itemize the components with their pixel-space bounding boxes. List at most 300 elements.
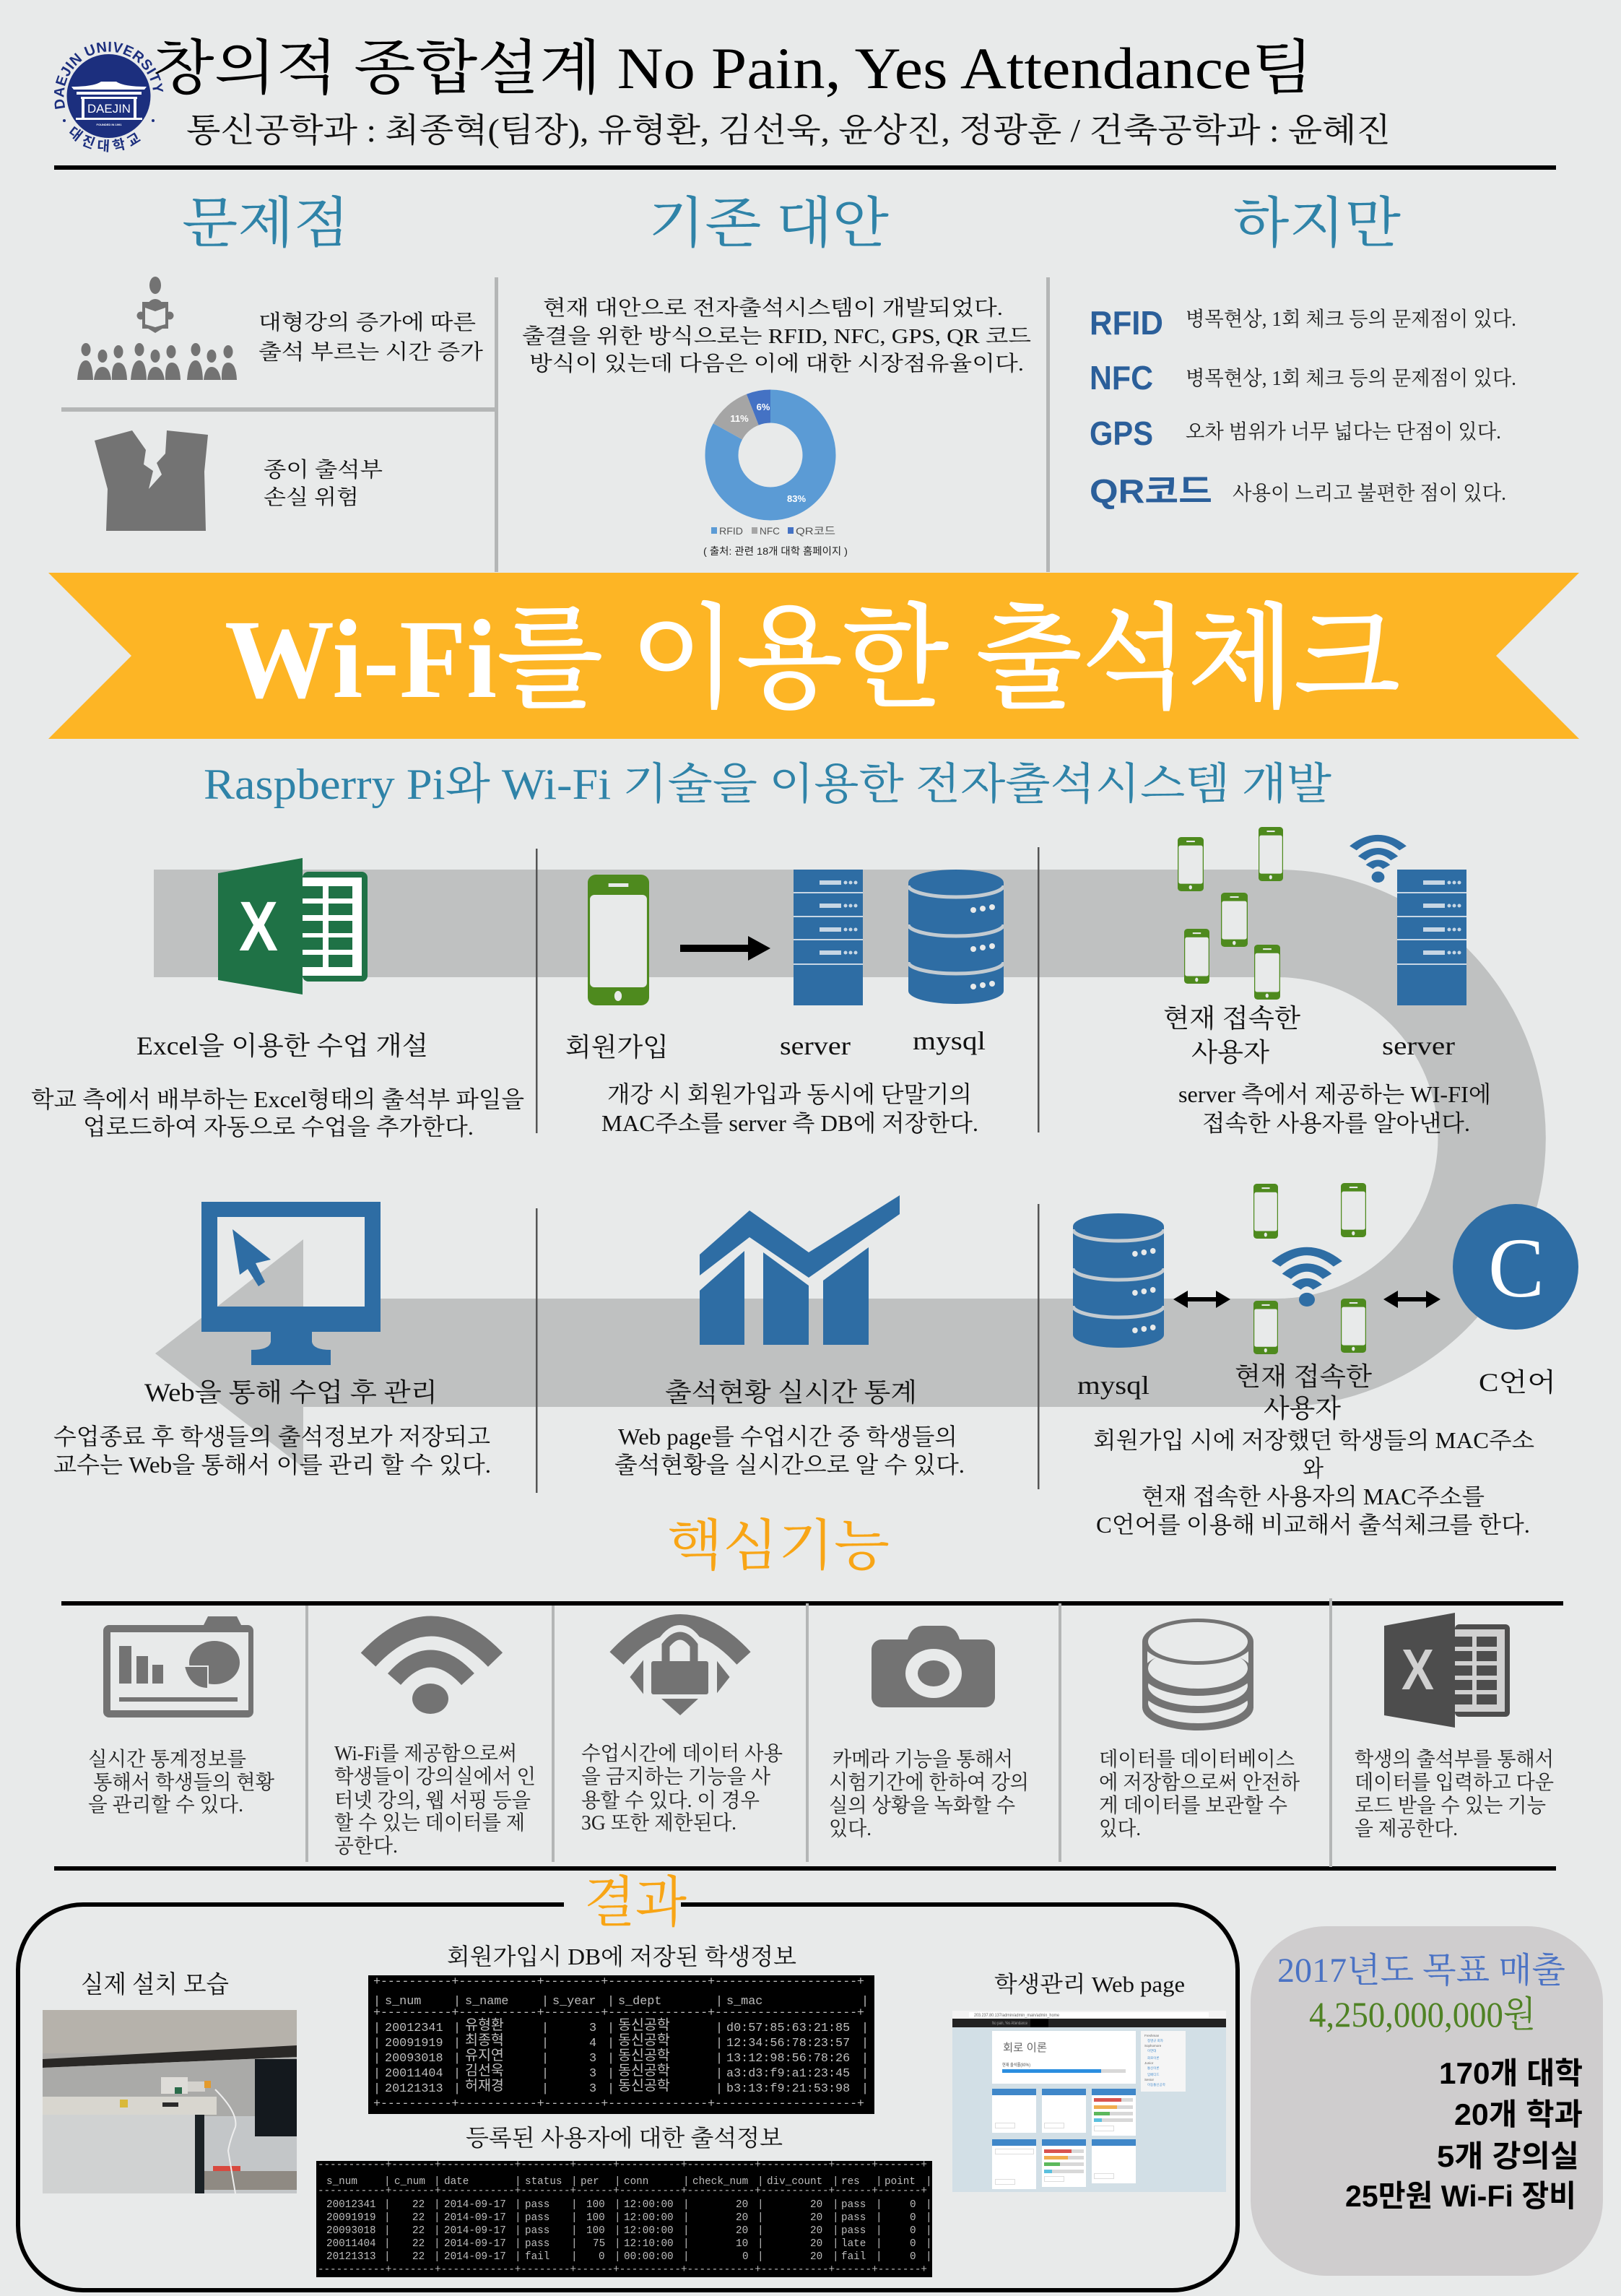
table: attendance: |	[833, 2238, 839, 2250]
table: student info: d0:57:85:63:21:85	[726, 2022, 850, 2035]
table: attendance: |	[683, 2199, 690, 2211]
table: attendance: 20011404	[326, 2238, 376, 2250]
label: connected users: 현재 접속한	[1235, 1362, 1372, 1391]
text: 있다.	[1099, 1817, 1141, 1840]
logo: Daejin University: DAEJIN	[87, 102, 131, 116]
table: attendance: |	[515, 2251, 521, 2263]
table: student info: 20121313	[385, 2082, 443, 2096]
table: attendance: |	[384, 2251, 391, 2263]
table: attendance: div_count	[767, 2176, 822, 2188]
QR code: QR코드	[1090, 472, 1212, 510]
table: student info: 20093018	[385, 2052, 443, 2066]
table: student info: 3	[589, 2052, 596, 2066]
description: 개강 시 회원가입과 동시에 단말기의	[607, 1081, 972, 1107]
text: 수업시간에 데이터 사용	[581, 1742, 783, 1765]
description: 학교 측에서 배부하는 Excel형태의 출석부 파일을	[31, 1086, 524, 1112]
table: attendance: 20	[736, 2212, 748, 2224]
description: 출석현황을 실시간으로 알 수 있다.	[614, 1452, 965, 1478]
table: student info: s_num	[385, 1995, 421, 2009]
table: attendance: pass	[525, 2212, 549, 2224]
table: attendance: late	[841, 2238, 866, 2250]
table: attendance: |	[683, 2238, 690, 2250]
table: attendance: 2014-09-17	[444, 2225, 506, 2237]
table: attendance: 0	[742, 2251, 749, 2263]
results frame	[18, 1905, 1238, 2290]
sales target heading: 2017년도 목표 매출	[1277, 1951, 1565, 1990]
table: attendance: 10	[736, 2238, 748, 2250]
table: attendance: 2014-09-17	[444, 2238, 506, 2250]
heading: problems: 문제점	[182, 194, 349, 254]
label: web page: 학생관리 Web page	[994, 1972, 1185, 1997]
table: student info: 최종혁	[465, 2028, 504, 2049]
table: attendance: |	[757, 2225, 764, 2237]
table: attendance: |	[384, 2176, 391, 2188]
text: 을 관리할 수 있다.	[88, 1793, 243, 1816]
table: attendance: |	[515, 2176, 521, 2188]
table: student info: b3:13:f9:21:53:98	[726, 2082, 850, 2096]
target list: 170개 대학	[1439, 2056, 1583, 2090]
table: attendance: check_num	[692, 2176, 748, 2188]
text: 카메라 기능을 통해서	[833, 1748, 1013, 1771]
table: attendance: |	[614, 2176, 621, 2188]
text	[1099, 1748, 1300, 1840]
label: installation: 실제 설치 모습	[81, 1971, 229, 1998]
GPS: 오차 범위가 너무 넓다는 단점이 있다.	[1186, 420, 1501, 443]
table: attendance: |	[876, 2251, 882, 2263]
label: connected users: 사용자	[1191, 1038, 1269, 1067]
table: student info: |	[453, 2067, 461, 2081]
table: student info: +----------+-----------+--------+--------------+--------------------+	[373, 1975, 864, 1989]
table: attendance: 2014-09-17	[444, 2212, 506, 2224]
team members: 통신공학과 : 최종혁(팀장), 유형환, 김선욱, 윤상진, 정광훈 / 건축공학과 : 윤혜진	[186, 112, 1391, 149]
table: student info: |	[542, 2082, 549, 2096]
table: student info: |	[453, 2037, 461, 2050]
table: attendance: 20	[736, 2225, 748, 2237]
chart legend	[711, 525, 835, 537]
table: student info: a3:d3:f9:a1:23:45	[726, 2067, 850, 2081]
table: student info: 3	[589, 2067, 596, 2081]
table: attendance: s_num	[326, 2176, 357, 2188]
table: attendance: |	[515, 2238, 521, 2250]
table: student info: |	[542, 1995, 549, 2009]
sales amount: 4,250,000,000원	[1309, 1994, 1536, 2035]
table: attendance: res	[841, 2176, 860, 2188]
table: student info: s_name	[465, 1995, 508, 2009]
text: 할 수 있는 데이터를 제	[334, 1811, 525, 1834]
NFC: NFC	[1090, 359, 1153, 397]
table: student info: |	[716, 1995, 723, 2009]
target list: 20개 학과	[1454, 2097, 1583, 2131]
title: 창의적 종합설계 No Pain, Yes Attendance팀	[152, 35, 1313, 101]
table: attendance: |	[434, 2212, 440, 2224]
table: attendance: |	[683, 2251, 690, 2263]
table: student info: |	[373, 2022, 381, 2035]
table: attendance: |	[571, 2238, 578, 2250]
table: attendance: |	[614, 2225, 621, 2237]
table: attendance: |	[434, 2251, 440, 2263]
table: attendance: |	[515, 2225, 521, 2237]
icon: Excel grey: X	[1401, 1637, 1434, 1702]
table: attendance: 100	[586, 2199, 605, 2211]
table: student info: |	[716, 2052, 723, 2066]
table: attendance: status	[525, 2176, 562, 2188]
table: attendance: |	[876, 2176, 882, 2188]
target list: 25만원 Wi-Fi 장비	[1345, 2179, 1576, 2213]
text: 데이터를 입력하고 다운	[1355, 1771, 1554, 1794]
chart: market share donut	[722, 402, 819, 504]
table: attendance: |	[434, 2176, 440, 2188]
table: attendance: |	[926, 2176, 932, 2188]
table: attendance: pass	[841, 2212, 866, 2224]
table: attendance: 0	[910, 2225, 916, 2237]
icon: Excel: X	[239, 887, 278, 966]
table: attendance: |	[571, 2212, 578, 2224]
screenshot: web page: 현재 출석률(80%)	[1002, 2062, 1030, 2068]
table: attendance: point	[885, 2176, 916, 2188]
screenshot: web page: 이연대	[1147, 2048, 1156, 2053]
chart: market share donut: 11%	[730, 413, 749, 424]
table: attendance: c_num	[394, 2176, 425, 2188]
text	[581, 1742, 783, 1834]
panel: problems	[77, 277, 483, 531]
feature: data lock	[581, 1624, 783, 1834]
label: server: server	[1382, 1031, 1455, 1060]
table: attendance: 20	[810, 2199, 822, 2211]
RFID	[1090, 304, 1516, 342]
description: 회원가입 시에 저장했던 학생들의 MAC주소	[1093, 1427, 1534, 1453]
table: student info: |	[861, 2037, 869, 2050]
label: Web을 통해 수업 후 관리	[144, 1378, 438, 1407]
text: lecture growth: 대형강의 증가에 따른	[258, 311, 476, 334]
icon: server	[1397, 870, 1466, 1005]
label: attendance data: 등록된 사용자에 대한 출석정보	[466, 2125, 783, 2151]
table: attendance: 12:00:00	[624, 2212, 674, 2224]
table: attendance: |	[757, 2251, 764, 2263]
table: student info: 3	[589, 2082, 596, 2096]
heading: results: 결과	[584, 1873, 687, 1933]
feature: camera	[829, 1626, 1029, 1840]
table: student info: |	[861, 2052, 869, 2066]
screenshot: web page: 통신이론	[1147, 2066, 1160, 2071]
table: student info: +----------+-----------+--------+--------------+--------------------+	[373, 2006, 864, 2020]
table: student info: 20012341	[385, 2022, 443, 2035]
table: student info: |	[716, 2082, 723, 2096]
table: attendance	[316, 2159, 932, 2277]
table: attendance: |	[876, 2212, 882, 2224]
table: attendance: |	[614, 2238, 621, 2250]
table: attendance: fail	[525, 2251, 549, 2263]
table: student info: s_dept	[618, 1995, 661, 2009]
text: Wi-Fi를 제공함으로써	[334, 1742, 517, 1765]
table: attendance: conn	[624, 2176, 648, 2188]
panel: however	[1090, 304, 1516, 510]
table: student info: s_mac	[726, 1995, 762, 2009]
screenshot: web page: Sophomore	[1144, 2044, 1162, 2048]
step: member registration	[565, 870, 1004, 1136]
table: attendance: 75	[593, 2238, 605, 2250]
table: attendance: |	[757, 2176, 764, 2188]
table: attendance: 12:00:00	[624, 2225, 674, 2237]
table: student info: 허재경	[465, 2074, 504, 2094]
arrow	[680, 936, 770, 961]
table: attendance: date	[444, 2176, 469, 2188]
description: server 측에서 제공하는 WI-FI에	[1178, 1081, 1491, 1107]
table: student info: |	[607, 1995, 614, 2009]
label: connected users: 현재 접속한	[1163, 1004, 1300, 1033]
icon: mysql database	[908, 870, 1004, 1004]
table: student info: 김선욱	[465, 2058, 504, 2079]
table: attendance: |	[683, 2212, 690, 2224]
table: attendance: |	[833, 2225, 839, 2237]
table: attendance: |	[926, 2225, 932, 2237]
table: attendance: pass	[841, 2199, 866, 2211]
table: student info: |	[453, 2052, 461, 2066]
table: attendance: |	[384, 2212, 391, 2224]
table: student info: |	[716, 2067, 723, 2081]
table: attendance: 22	[412, 2225, 425, 2237]
chart legend: RFID	[719, 525, 743, 537]
chart legend: QR코드	[796, 525, 835, 537]
description: 접속한 사용자를 알아낸다.	[1202, 1110, 1470, 1136]
label: mysql: mysql	[913, 1026, 986, 1055]
icon: phone	[588, 875, 649, 1005]
description	[601, 1081, 978, 1136]
table: attendance: -----------+-------+------------+--------+------+----------+-----------+-----------+------+-------+	[318, 2159, 927, 2171]
table: student info: 3	[589, 2022, 596, 2035]
icon: mysql database	[1073, 1213, 1164, 1348]
banner: Wi-Fi를 이용한 출석체크	[225, 597, 1400, 722]
table: attendance: per	[581, 2176, 599, 2188]
table: attendance: 22	[412, 2212, 425, 2224]
table: attendance: 20	[810, 2251, 822, 2263]
table: student info: |	[453, 2082, 461, 2096]
table: attendance: |	[515, 2199, 521, 2211]
step: Excel course creation	[31, 858, 524, 1140]
table: student info: |	[542, 2052, 549, 2066]
text: lecture growth	[258, 311, 483, 364]
feature: Excel	[1355, 1613, 1554, 1840]
table: student info: |	[716, 2037, 723, 2050]
screenshot: web page: 이동통신공학	[1147, 2082, 1165, 2087]
screenshot: web page	[952, 2011, 1226, 2192]
table: attendance: |	[876, 2225, 882, 2237]
icons: connected phones	[1253, 1183, 1366, 1354]
logo: Daejin University: FOUNDED IN 1991	[97, 123, 122, 126]
screenshot: web page: Senior	[1144, 2078, 1155, 2081]
text: 데이터를 데이터베이스	[1099, 1748, 1295, 1771]
icon: wifi lock	[617, 1624, 744, 1715]
table: attendance: |	[833, 2251, 839, 2263]
text: 에 저장함으로써 안전하	[1099, 1771, 1300, 1794]
table: student info: s_year	[552, 1995, 596, 2009]
table: attendance: 20	[810, 2225, 822, 2237]
label: connected users	[1235, 1362, 1372, 1423]
NFC	[1090, 359, 1516, 397]
table: attendance: 20	[810, 2238, 822, 2250]
table: student info: 동신공학	[618, 2013, 670, 2034]
table: attendance: |	[614, 2251, 621, 2263]
table: attendance: |	[757, 2199, 764, 2211]
table: attendance: |	[926, 2251, 932, 2263]
flow arrow band	[154, 870, 1546, 1468]
description	[614, 1424, 965, 1478]
panel: sales target	[1251, 1926, 1603, 2276]
GPS	[1090, 415, 1501, 452]
description: 현재 접속한 사용자의 MAC주소를	[1142, 1483, 1485, 1509]
table: attendance: |	[384, 2225, 391, 2237]
text: 통해서 학생들의 현황	[93, 1771, 274, 1794]
table: attendance: |	[833, 2199, 839, 2211]
table: attendance: |	[434, 2199, 440, 2211]
table: student info: 20011404	[385, 2067, 443, 2081]
double arrow left	[1173, 1291, 1230, 1308]
table: student info: |	[373, 2052, 381, 2066]
panel: existing alternatives	[522, 296, 1031, 557]
table: attendance: |	[571, 2176, 578, 2188]
step: detect connected users	[1163, 827, 1491, 1136]
icon: monitor	[201, 1202, 381, 1365]
description: 와	[1303, 1455, 1324, 1481]
table: student info: |	[716, 2022, 723, 2035]
text: 학생의 출석부를 통해서	[1355, 1748, 1554, 1771]
screenshot: web page: 회로 이론	[1003, 2042, 1047, 2054]
description: MAC주소를 server 측 DB에 저장한다.	[601, 1110, 978, 1136]
table: attendance: 22	[412, 2251, 425, 2263]
table: attendance: |	[833, 2212, 839, 2224]
description	[1178, 1081, 1491, 1136]
icon: wifi	[368, 1626, 495, 1714]
table: attendance: 0	[910, 2212, 916, 2224]
icon: torn paper	[95, 430, 208, 531]
table: attendance: |	[876, 2199, 882, 2211]
label: Excel을 이용한 수업 개설	[136, 1031, 428, 1060]
icon: C language: C	[1488, 1221, 1544, 1315]
photo: installation	[43, 2010, 297, 2193]
table: student info: |	[373, 2067, 381, 2081]
description: 수업종료 후 학생들의 출석정보가 저장되고	[53, 1424, 490, 1450]
screenshot: web page: Junior	[1144, 2061, 1154, 2065]
text: paper risk: 종이 출석부	[264, 458, 383, 482]
double arrow right	[1383, 1291, 1440, 1308]
table: attendance: 2014-09-17	[444, 2251, 506, 2263]
logo: Daejin University	[53, 42, 163, 152]
table: attendance: fail	[841, 2251, 866, 2263]
text	[88, 1748, 274, 1816]
table: attendance: 2014-09-17	[444, 2199, 506, 2211]
table: attendance: |	[571, 2251, 578, 2263]
text	[829, 1748, 1029, 1840]
NFC: 병목현상, 1회 체크 등의 문제점이 있다.	[1186, 367, 1516, 390]
text: paper risk	[264, 458, 383, 509]
table: attendance: pass	[525, 2225, 549, 2237]
text	[1355, 1748, 1554, 1840]
table: attendance: 20012341	[326, 2199, 376, 2211]
table: student info: |	[542, 2067, 549, 2081]
table: attendance: |	[833, 2176, 839, 2188]
icon: wifi	[1353, 838, 1403, 883]
table: student info: |	[861, 2067, 869, 2081]
icon: server	[794, 870, 863, 1005]
table: attendance: |	[571, 2199, 578, 2211]
table: student info: |	[607, 2022, 614, 2035]
table: student info: |	[453, 2022, 461, 2035]
description: C언어를 이용해 비교해서 출석체크를 한다.	[1096, 1512, 1530, 1538]
table: attendance: |	[571, 2225, 578, 2237]
table: student info: |	[542, 2022, 549, 2035]
table: student info: |	[373, 2037, 381, 2050]
source note: ( 출처: 관련 18개 대학 홈페이지 )	[703, 545, 848, 557]
label: connected users	[1163, 1004, 1300, 1067]
table: attendance: 22	[412, 2238, 425, 2250]
table: student info: |	[373, 1995, 381, 2009]
table: attendance: |	[757, 2238, 764, 2250]
table: student info: 13:12:98:56:78:26	[726, 2052, 850, 2066]
table: attendance: pass	[525, 2238, 549, 2250]
chart: market share donut: 83%	[787, 493, 806, 504]
text: lecture growth: 출석 부르는 시간 증가	[258, 340, 483, 364]
screenshot: web page: 임베디드	[1147, 2072, 1160, 2077]
text: 공한다.	[334, 1834, 398, 1858]
text: 용할 수 있다. 이 경우	[581, 1789, 760, 1812]
table: student info: |	[373, 2082, 381, 2096]
table: attendance: |	[926, 2199, 932, 2211]
text: 학생들이 강의실에서 인	[334, 1765, 536, 1788]
table: attendance: 20	[736, 2199, 748, 2211]
description	[31, 1086, 524, 1140]
target list	[1345, 2056, 1583, 2213]
feature: realtime statistics	[88, 1616, 274, 1816]
table: attendance: |	[926, 2212, 932, 2224]
table: attendance: |	[683, 2176, 690, 2188]
icon: wifi	[1276, 1251, 1338, 1307]
label: connected users: 사용자	[1264, 1394, 1341, 1423]
table: student info: 동신공학	[618, 2028, 670, 2049]
feature: database	[1099, 1619, 1300, 1840]
table: attendance: 0	[599, 2251, 605, 2263]
table: student info: |	[542, 2037, 549, 2050]
description: 업로드하여 자동으로 수업을 추가한다.	[83, 1114, 474, 1140]
label: server: server	[780, 1031, 851, 1060]
label: 출석현황 실시간 통계	[665, 1378, 917, 1407]
table: attendance: |	[434, 2225, 440, 2237]
table: attendance: |	[515, 2212, 521, 2224]
step: web management	[53, 1202, 491, 1478]
table: student info: |	[607, 2037, 614, 2050]
icon: camera	[872, 1626, 995, 1707]
label: C language: C언어	[1479, 1368, 1556, 1397]
RFID: 병목현상, 1회 체크 등의 문제점이 있다.	[1186, 308, 1516, 331]
text	[334, 1742, 536, 1858]
feature: Wi-Fi	[334, 1626, 536, 1858]
table: student info: |	[861, 2082, 869, 2096]
QR code: 사용이 느리고 불편한 점이 있다.	[1233, 482, 1506, 505]
table: student info: 유형환	[465, 2013, 504, 2034]
text: alternatives description: 현재 대안으로 전자출석시스템이 개발되었다.	[543, 296, 1003, 320]
table: attendance: |	[757, 2212, 764, 2224]
screenshot: web page: No pain, Yes Attendance	[992, 2022, 1027, 2026]
table: student info: 20091919	[385, 2037, 443, 2050]
table: student info: 유지연	[465, 2043, 504, 2064]
heading: however: 하지만	[1233, 194, 1401, 254]
table: attendance: pass	[525, 2199, 549, 2211]
table: attendance: |	[614, 2199, 621, 2211]
text: 시험기간에 한하여 강의	[829, 1771, 1029, 1794]
text: alternatives description	[522, 296, 1031, 376]
text: 3G 또한 제한된다.	[581, 1811, 736, 1834]
table: attendance: 00:00:00	[624, 2251, 674, 2263]
table: attendance: 0	[910, 2199, 916, 2211]
icon: Excel	[218, 858, 368, 995]
